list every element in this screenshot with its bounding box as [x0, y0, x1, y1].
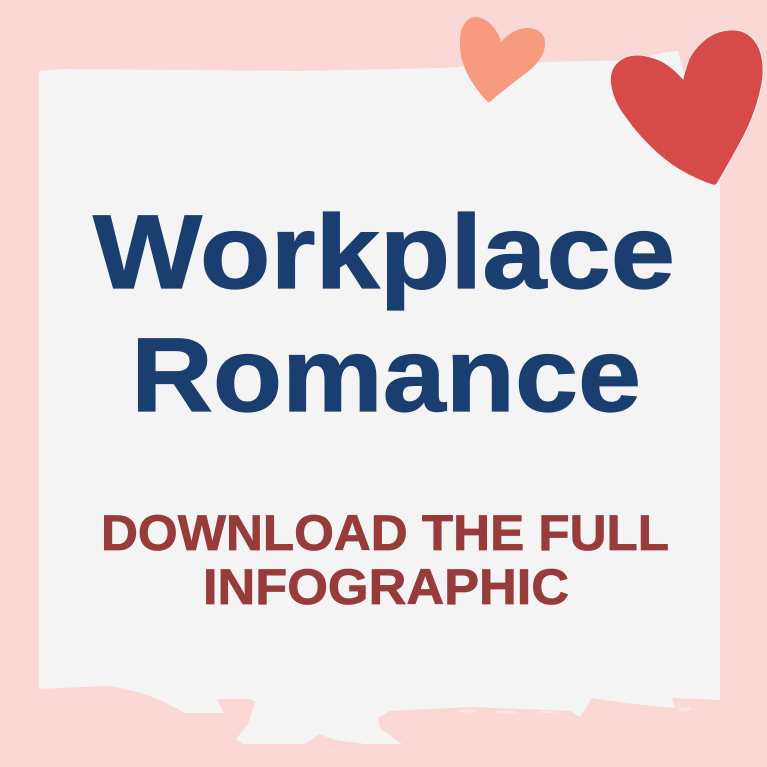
icon: red heart [610, 30, 763, 185]
title: Romance [131, 317, 641, 434]
icon: orange heart [460, 17, 545, 102]
title: Workplace [93, 194, 675, 311]
title [93, 194, 675, 434]
call to action: INFOGRAPHIC [203, 559, 569, 615]
call to action [101, 505, 669, 615]
streak marks along the torn edge [457, 707, 691, 714]
call to action: DOWNLOAD THE FULL [101, 505, 669, 561]
